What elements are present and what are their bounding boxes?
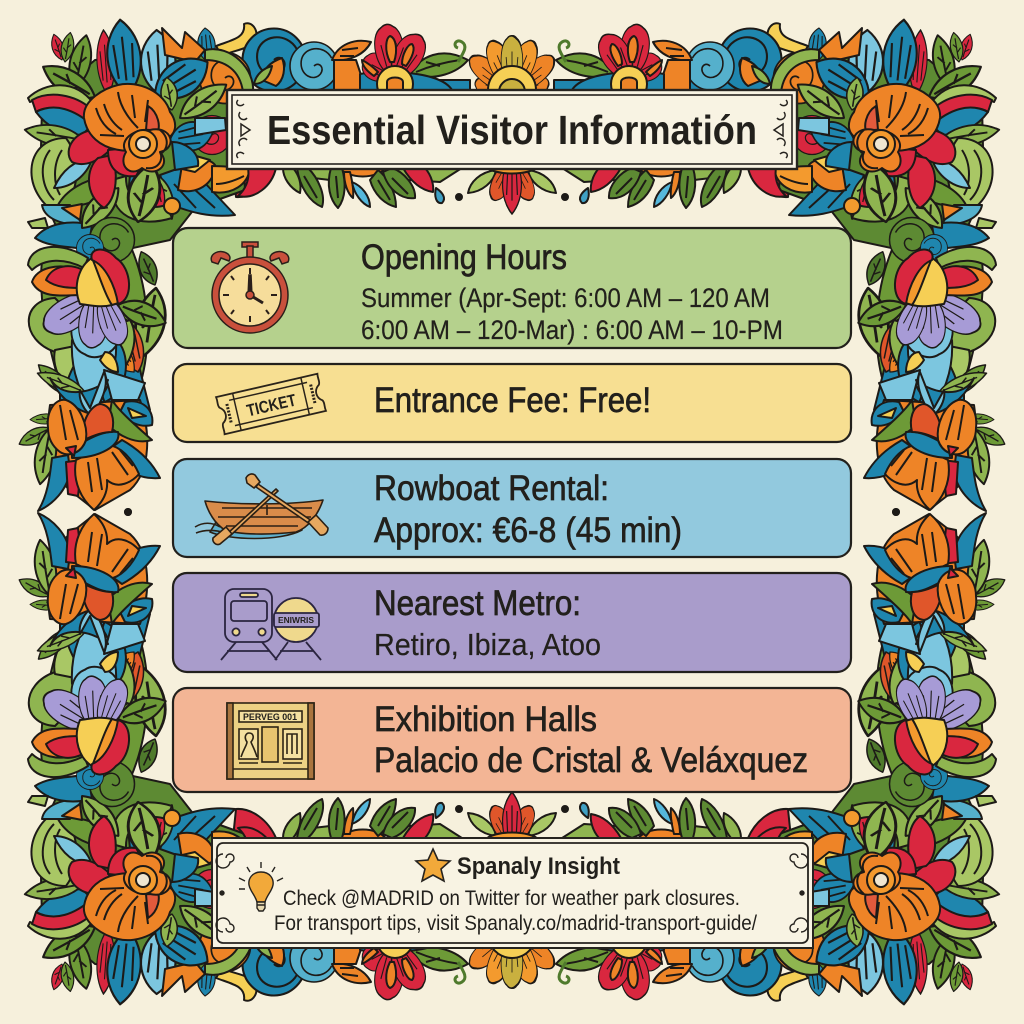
rowboat heading: Rowboat Rental: [374, 469, 609, 508]
icon: metro train and station [221, 589, 321, 660]
hours line 2: 6:00 AM – 120-Mar) : 6:00 AM – 10-PM [361, 315, 783, 345]
panel: exhibition halls [173, 688, 851, 792]
floral band under title, right [485, 155, 791, 214]
icon: exhibition poster: PERVEG 001 [243, 712, 297, 722]
icon: ticket [216, 374, 326, 434]
icon: metro train and station: ENIWRIS [278, 616, 315, 625]
panel: entrance fee [173, 364, 851, 442]
insight box [212, 838, 813, 948]
icon: ticket: TICKET [245, 390, 298, 420]
insight heading: Spanaly Insight [457, 853, 620, 880]
insight line 1: Check @MADRID on Twitter for weather park closures. [283, 887, 740, 910]
insight line 2: For transport tips, visit Spanaly.co/madrid-transport-guide/ [274, 912, 757, 935]
floral border: top right quadrant [464, 18, 1008, 515]
heading: opening hours: Opening Hours [361, 238, 567, 277]
exhibition venues: Palacio de Cristal & Veláxquez [374, 741, 808, 780]
icon: rowboat [195, 474, 328, 545]
panel: rowboat rental [173, 459, 851, 557]
icon: stopwatch [211, 242, 289, 333]
floral band above insight box, right [485, 792, 791, 851]
title banner [227, 90, 797, 169]
icon: star [416, 849, 450, 881]
metro stations: Retiro, Ibiza, Atoo [374, 627, 601, 662]
floral border: bottom right quadrant [464, 509, 1008, 1006]
floral band above insight box, left [233, 792, 539, 851]
title text: Essential Visitor Informatión [267, 107, 757, 153]
hours line 1: Summer (Apr-Sept: 6:00 AM – 120 AM [361, 283, 770, 313]
metro heading: Nearest Metro: [374, 584, 581, 623]
exhibition heading: Exhibition Halls [374, 700, 597, 739]
icon: exhibition poster [227, 703, 314, 779]
panel: nearest metro [173, 573, 851, 672]
icon: light bulb [239, 862, 283, 911]
rowboat price: Approx: €6-8 (45 min) [374, 511, 682, 550]
floral border: top left quadrant [16, 18, 560, 515]
panel: opening hours [173, 228, 851, 348]
entrance fee text: Entrance Fee: Free! [374, 381, 651, 420]
floral band under title, left [233, 155, 539, 214]
floral border: bottom left quadrant [16, 509, 560, 1006]
